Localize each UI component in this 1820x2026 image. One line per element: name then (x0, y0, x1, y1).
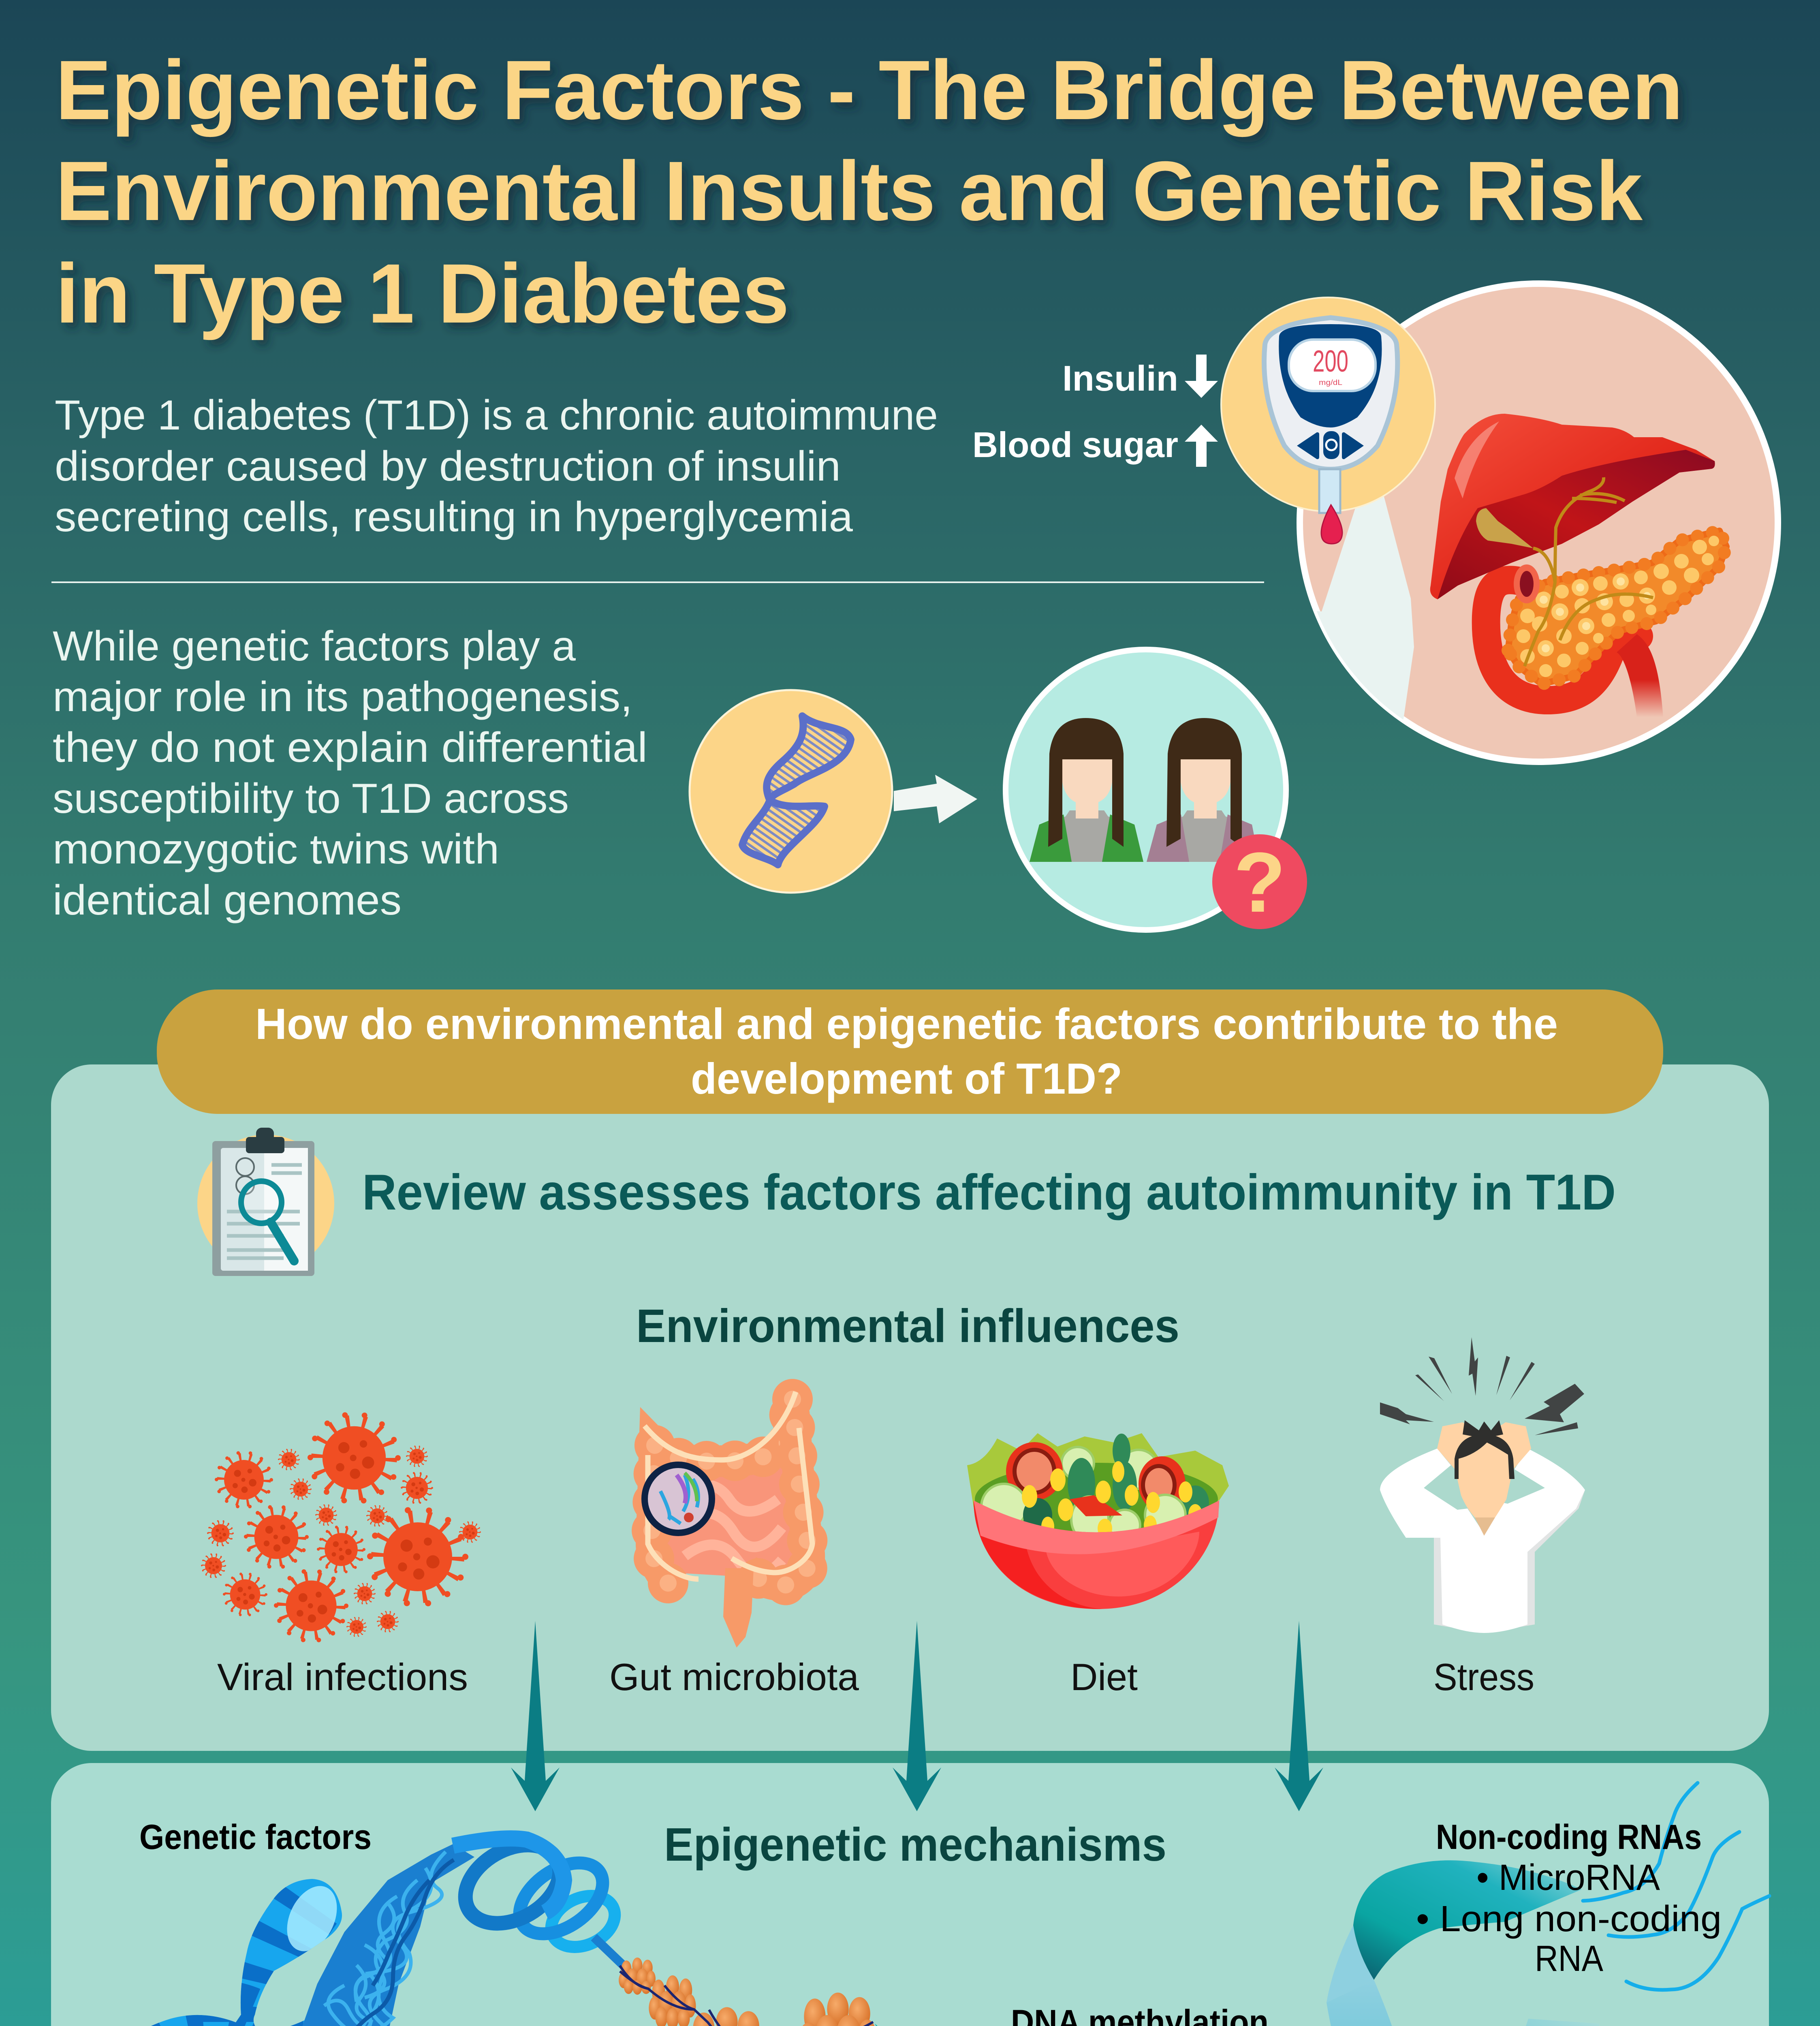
question banner (157, 989, 1663, 1114)
ribbon upright top (1327, 1925, 1374, 2002)
arrow: environmental 3 to epigenetic (1275, 1621, 1323, 1811)
label: gut microbiota: Gut microbiota (609, 1656, 859, 1698)
label: stress: Stress (1433, 1656, 1534, 1698)
meter body (1264, 318, 1397, 469)
label: insulin down: Insulin (1062, 358, 1178, 398)
meter display housing (1279, 324, 1382, 427)
ribbon swoop from nucleosome (875, 2024, 1083, 2026)
chromatin fibre (301, 1844, 474, 2026)
coils (543, 1886, 623, 1957)
intro text: genetic factors and twins: susceptibility to T1D across (53, 775, 569, 822)
icon: viruses (202, 1414, 480, 1641)
icon: question mark: ? (1234, 835, 1286, 930)
icon: intestine with microbiota (645, 1392, 812, 1648)
title: Environmental Insults and Genetic Risk (56, 144, 1643, 238)
meter buttons (1297, 432, 1364, 459)
intro text: genetic factors and twins: While genetic factors play a (53, 623, 576, 670)
duodenum (1486, 580, 1639, 700)
panel: epigenetic mechanisms (51, 1763, 1769, 2026)
label: diet: Diet (1070, 1656, 1138, 1698)
illustration: nucleosomes (619, 1958, 876, 2026)
question banner: development of T1D? (691, 1054, 1122, 1103)
intro text: genetic factors and twins: they do not explain differential (53, 724, 647, 771)
panel: review and environmental influences (51, 1064, 1769, 1751)
bile ducts (1525, 477, 1653, 666)
duodenum lumen (1514, 564, 1540, 603)
illustration: RNA strands (1583, 1783, 1769, 1990)
intro text: genetic factors and twins (53, 623, 647, 924)
gallbladder (1476, 508, 1533, 548)
blood drop (1321, 505, 1342, 544)
ribbon main upright (1261, 1980, 1410, 2026)
meter screen (1289, 340, 1376, 391)
title (56, 43, 1683, 341)
label: non-coding RNAs: Non-coding RNAs (1436, 1818, 1702, 1857)
heading: environmental influences: Environmental influences (636, 1299, 1179, 1352)
arrow: environmental 1 to epigenetic (511, 1621, 560, 1811)
illustration: DNA ribbon (875, 1860, 1600, 2026)
label: non-coding RNAs: • MicroRNA (1476, 1857, 1660, 1898)
label: insulin down (1062, 355, 1218, 398)
label: non-coding RNAs: RNA (1535, 1938, 1603, 1979)
heading: review: Review assesses factors affecting autoimmunity in T1D (362, 1165, 1616, 1220)
icon: salad bowl (967, 1433, 1229, 1609)
test strip (1319, 469, 1340, 513)
label: non-coding RNAs (1416, 1818, 1722, 1979)
liver underside (1438, 450, 1715, 599)
heading: epigenetic mechanisms: Epigenetic mechanisms (664, 1818, 1166, 1871)
twin 2 (1147, 718, 1259, 862)
label: viral infections: Viral infections (217, 1656, 468, 1698)
chromatin squiggles (324, 1852, 446, 2026)
intro text: genetic factors and twins: monozygotic twins with (53, 826, 499, 873)
icon: stressed person (1380, 1337, 1585, 1633)
twin 1 (1030, 718, 1143, 862)
intro text: definition of T1D: Type 1 diabetes (T1D) is a chronic autoimmune (55, 392, 938, 439)
ribbon top band (1353, 1860, 1582, 1980)
intro text: definition of T1D: disorder caused by destruction of insulin (55, 443, 841, 490)
title: Epigenetic Factors - The Bridge Between (56, 43, 1683, 137)
illustration: liver and pancreas circle (1276, 284, 1778, 770)
intro text: definition of T1D: secreting cells, resulting in hyperglycemia (55, 494, 853, 541)
liver highlight (1455, 421, 1499, 498)
illustration: chromosome (73, 1829, 624, 2026)
icon: clipboard with magnifier (197, 1128, 334, 1276)
illustration: twins circle (1006, 650, 1286, 930)
label: non-coding RNAs: • Long non-coding (1416, 1899, 1722, 1939)
duodenum tail (1617, 634, 1663, 717)
white coat sleeve (1317, 497, 1414, 720)
meter unit: mg/dL (1319, 378, 1342, 387)
label: genetic factors: Genetic factors (139, 1818, 372, 1857)
intro text: genetic factors and twins: identical genomes (53, 877, 402, 924)
question banner: How do environmental and epigenetic factors contribute to the (255, 999, 1558, 1048)
liver (1430, 414, 1715, 599)
title: in Type 1 Diabetes (56, 247, 789, 341)
illustration: glucose meter circle (1221, 297, 1435, 544)
intro text: genetic factors and twins: major role in its pathogenesis, (53, 673, 632, 720)
label: blood sugar up: Blood sugar (972, 425, 1178, 465)
icon: question mark (1212, 834, 1307, 930)
intro text: definition of T1D (55, 392, 938, 541)
meter reading: 200 (1313, 344, 1348, 378)
arrow: environmental 2 to epigenetic (893, 1621, 941, 1811)
icon: DNA circle (690, 690, 892, 893)
pancreas (1508, 531, 1726, 684)
ribbon tail right (1407, 2019, 1600, 2026)
arrow: DNA to twins (894, 775, 977, 823)
